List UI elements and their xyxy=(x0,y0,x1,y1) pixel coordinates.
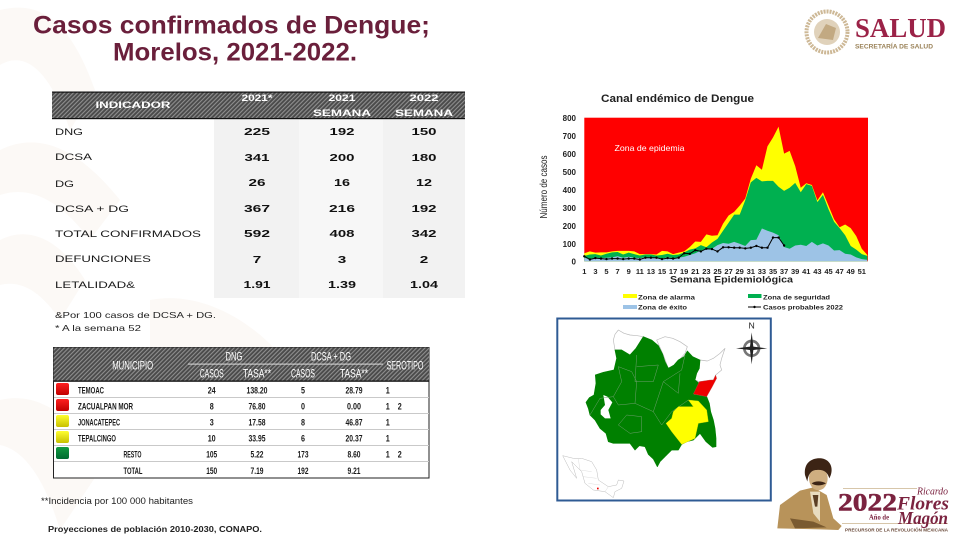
logo: Secretaría de Salud xyxy=(806,12,946,52)
x axis: 41 xyxy=(802,267,810,276)
row: Resto xyxy=(56,447,402,460)
title xyxy=(33,12,430,66)
lettering: 2022 Año de Ricardo Flores Magón: PRECURSOR DE LA REVOLUCIÓN MEXICANA xyxy=(845,528,948,532)
row: Zacualpan: 0 xyxy=(301,402,305,412)
row: Temoac: TEMOAC xyxy=(78,386,104,396)
municipios header: CASOS xyxy=(200,366,224,380)
x axis: 47 xyxy=(835,267,844,276)
table header: INDICADOR xyxy=(96,100,171,111)
row: Zacualpan: 76.80 xyxy=(248,402,266,412)
row: Temoac xyxy=(56,383,390,396)
row: Jonacatepec: JONACATEPEC xyxy=(78,418,120,428)
y axis: 400 xyxy=(563,186,577,195)
red municipalities xyxy=(693,375,717,397)
y axis: 800 xyxy=(563,114,577,123)
footnote: proyecciones: Proyecciones de población 2010-2030, CONAPO. xyxy=(48,525,262,534)
row: Tepalcingo: 6 xyxy=(301,434,305,444)
background pattern xyxy=(0,8,300,530)
chart legend: Zona de éxito xyxy=(638,304,687,312)
table: indicadores: 192 xyxy=(412,203,437,215)
zona de seguridad xyxy=(584,178,867,261)
table: indicadores: 1.91 xyxy=(244,279,271,291)
x axis: 11 xyxy=(636,267,644,276)
row: Total: TOTAL xyxy=(124,466,143,477)
x axis: 45 xyxy=(824,267,833,276)
table: indicadores: 192 xyxy=(330,126,355,138)
row: Tepalcingo: 1 xyxy=(386,434,390,444)
chart legend xyxy=(623,294,843,312)
table header: SEMANA xyxy=(313,108,371,119)
row: Resto: 2 xyxy=(398,450,402,460)
municipios header: TASA** xyxy=(243,366,271,380)
row: Temoac: 24 xyxy=(208,386,216,396)
x axis title: Semana Epidemiológica xyxy=(670,274,794,286)
row: Total: 150 xyxy=(206,466,217,477)
x axis: 9 xyxy=(627,267,631,276)
row: Temoac: 138.20 xyxy=(246,386,268,396)
table: indicadores: 408 xyxy=(330,228,355,240)
x axis: 13 xyxy=(647,267,655,276)
y axis: 700 xyxy=(563,132,577,141)
table: indicadores: 1.04 xyxy=(410,279,438,291)
x axis: 19 xyxy=(680,267,688,276)
row: Resto: 173 xyxy=(298,450,308,460)
row: Jonacatepec: 17.58 xyxy=(248,418,266,428)
casos probables 2022 line xyxy=(584,238,784,260)
row: Tepalcingo: 33.95 xyxy=(248,434,266,444)
table: indicadores: DCSA xyxy=(55,152,93,163)
x axis: 37 xyxy=(780,267,788,276)
y axis xyxy=(563,114,577,266)
row: Tepalcingo: TEPALCINGO xyxy=(78,434,116,444)
municipios header: SEROTIPO xyxy=(386,358,424,372)
title: Morelos, 2021-2022. xyxy=(113,38,357,66)
x axis: 3 xyxy=(593,267,597,276)
table: indicadores: DEFUNCIONES xyxy=(55,254,151,265)
y axis: 500 xyxy=(563,168,577,177)
chart legend: Casos probables 2022 xyxy=(763,304,843,312)
table: indicadores: 225 xyxy=(244,126,270,138)
x axis: 7 xyxy=(616,267,620,276)
x axis: 15 xyxy=(658,267,666,276)
zona de epidemia xyxy=(584,118,868,261)
northern white municipalities xyxy=(613,330,725,382)
row: Total: 9.21 xyxy=(348,466,361,477)
table: indicadores: TOTAL CONFIRMADOS xyxy=(55,229,201,240)
municipios header: DCSA + DG xyxy=(311,350,351,364)
municipios header xyxy=(54,348,429,382)
yellow municipalities xyxy=(666,400,708,444)
table: indicadores: 12 xyxy=(416,177,432,189)
x axis: 43 xyxy=(813,267,822,276)
row: Jonacatepec xyxy=(56,415,390,428)
y axis: 200 xyxy=(563,222,577,231)
table: indicadores: 592 xyxy=(244,228,270,240)
locator map of Mexico xyxy=(563,456,624,498)
row: Resto: 1 xyxy=(386,450,390,460)
row: Zacualpan: 0.00 xyxy=(347,402,361,412)
chart: canal endémico xyxy=(538,114,868,286)
x axis xyxy=(582,267,866,276)
footnote: incidencia: **Incidencia por 100 000 habitantes xyxy=(41,496,194,506)
row: Tepalcingo: 10 xyxy=(208,434,216,444)
y axis: 100 xyxy=(563,240,577,249)
table: indicadores: DNG xyxy=(55,127,83,138)
table notes xyxy=(55,310,216,333)
table: indicadores: 26 xyxy=(248,177,266,189)
x axis: 21 xyxy=(691,267,699,276)
row: Resto: RESTO xyxy=(124,450,142,460)
row: Jonacatepec: 46.87 xyxy=(346,418,362,428)
row: Jonacatepec: 3 xyxy=(210,418,214,428)
table: indicadores: 1.39 xyxy=(328,279,356,291)
table header: 2022 xyxy=(410,93,438,104)
row: Resto: 105 xyxy=(206,450,218,460)
chart title: Canal endémico de Dengue xyxy=(601,93,754,105)
table: indicadores: 2 xyxy=(420,254,428,266)
compass rose xyxy=(736,332,767,364)
zona de epidemia label: Zona de epidemia xyxy=(614,143,685,153)
table: indicadores: 180 xyxy=(412,152,437,164)
lettering: 2022 Año de Ricardo Flores Magón xyxy=(838,486,949,532)
x axis: 27 xyxy=(724,267,733,276)
row: Tepalcingo: 20.37 xyxy=(346,434,362,444)
illustration: Ricardo Flores Magón xyxy=(777,458,842,530)
title: Casos confirmados de Dengue; xyxy=(33,12,430,40)
table: indicadores: 367 xyxy=(244,203,270,215)
municipios header: DNG xyxy=(226,350,242,364)
map panel: Morelos xyxy=(557,318,771,500)
zona de alarma xyxy=(584,127,867,261)
table: indicadores: DCSA + DG xyxy=(55,204,129,215)
row: Temoac: 28.79 xyxy=(346,386,362,396)
zona de éxito xyxy=(584,228,867,261)
y axis: 300 xyxy=(563,204,577,213)
lettering: 2022 Año de Ricardo Flores Magón: Flores xyxy=(896,494,949,514)
table header: SEMANA xyxy=(395,108,453,119)
lettering: 2022 Año de Ricardo Flores Magón: 2022 xyxy=(838,490,897,516)
row: Zacualpan xyxy=(56,399,402,412)
table: indicadores: 341 xyxy=(244,152,270,164)
row: Temoac: 1 xyxy=(386,386,390,396)
table: indicadores: 342 xyxy=(412,228,437,240)
lettering: 2022 Año de Ricardo Flores Magón: Año de xyxy=(869,514,889,522)
x axis: 29 xyxy=(736,267,744,276)
y axis title: Número de casos xyxy=(538,156,550,218)
y axis: 0 xyxy=(572,258,577,266)
x axis: 25 xyxy=(713,267,722,276)
row: Temoac: 5 xyxy=(301,386,306,396)
lettering: 2022 Año de Ricardo Flores Magón: Magón xyxy=(897,508,948,528)
row: Zacualpan: ZACUALPAN MOR xyxy=(78,402,133,412)
x axis: 49 xyxy=(847,267,855,276)
table: indicadores: 200 xyxy=(330,152,355,164)
x axis: 31 xyxy=(747,267,755,276)
table: indicadores: 150 xyxy=(412,126,437,138)
row: Resto: 5.22 xyxy=(250,450,264,460)
chart legend: Zona de alarma xyxy=(638,294,695,302)
table: indicadores: 7 xyxy=(253,254,261,266)
municipios header: CASOS xyxy=(291,366,315,380)
row: Total: 7.19 xyxy=(250,466,264,477)
table: indicadores: 16 xyxy=(334,177,350,189)
north label: N xyxy=(749,320,755,330)
row: Jonacatepec: 1 xyxy=(386,418,390,428)
table notes: &Por 100 casos de DCSA + DG. xyxy=(55,310,216,320)
row: Zacualpan: 1 xyxy=(386,402,390,412)
municipios header: TASA** xyxy=(340,366,368,380)
row: Tepalcingo xyxy=(56,431,390,444)
row: Total xyxy=(124,466,361,477)
table: indicadores: LETALIDAD& xyxy=(55,280,136,291)
table notes: * A la semana 52 xyxy=(55,323,141,333)
x axis: 1 xyxy=(582,267,586,276)
row: Zacualpan: 2 xyxy=(398,402,402,412)
logo: Secretaría de Salud: SECRETARÍA DE SALUD xyxy=(855,42,933,50)
row: Jonacatepec: 8 xyxy=(301,418,305,428)
table: indicadores: 216 xyxy=(329,203,355,215)
table header: 2021 xyxy=(328,93,356,104)
x axis: 5 xyxy=(604,267,609,276)
x axis: 35 xyxy=(769,267,777,276)
table: municipios xyxy=(54,348,429,478)
table header xyxy=(52,92,465,119)
x axis: 17 xyxy=(669,267,677,276)
row: Zacualpan: 8 xyxy=(210,402,214,412)
table: indicadores xyxy=(52,92,465,298)
municipios header: MUNICIPIO xyxy=(112,358,153,372)
x axis: 39 xyxy=(791,267,799,276)
x axis: 51 xyxy=(858,267,866,276)
row: Total: 192 xyxy=(298,466,308,477)
table header: 2021* xyxy=(242,93,273,104)
logo: Secretaría de Salud: SALUD xyxy=(855,13,946,43)
x axis: 33 xyxy=(758,267,766,276)
lettering: 2022 Año de Ricardo Flores Magón: Ricardo xyxy=(916,486,948,498)
x axis: 23 xyxy=(702,267,711,276)
y axis: 600 xyxy=(563,150,577,159)
table: indicadores: DG xyxy=(55,179,74,190)
row: Resto: 8.60 xyxy=(348,450,360,460)
table: indicadores: 3 xyxy=(338,254,346,266)
chart legend: Zona de seguridad xyxy=(763,294,830,302)
green municipalities xyxy=(586,337,716,467)
